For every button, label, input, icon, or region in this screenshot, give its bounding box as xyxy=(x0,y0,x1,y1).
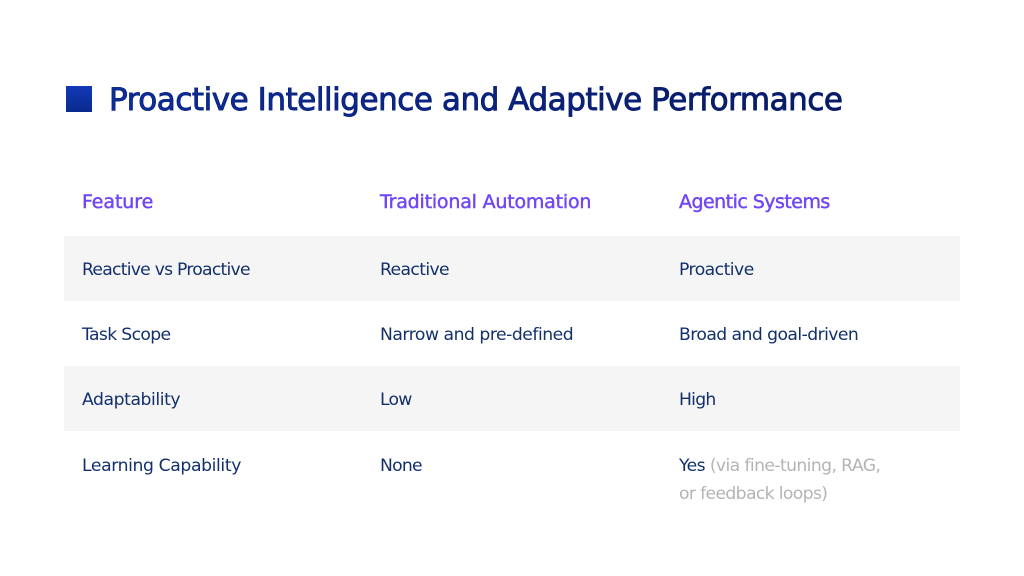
column heading: Agentic Systems: Agentic Systems xyxy=(679,191,830,213)
row background: Reactive vs Proactive xyxy=(64,236,960,301)
cell: Low: Low xyxy=(380,390,412,410)
column heading: Feature: Feature xyxy=(82,191,153,213)
cell: Learning Capability: Learning Capability xyxy=(82,456,241,476)
cell: Yes with details: Yes (via fine-tuning, RAG, xyxy=(679,456,880,476)
cell: Yes with details: or feedback loops) xyxy=(679,484,827,504)
cell: Task Scope: Task Scope xyxy=(82,325,170,345)
cell: Reactive: Reactive xyxy=(380,260,449,280)
cell: High: High xyxy=(679,390,716,410)
cell: Broad and goal-driven: Broad and goal-driven xyxy=(679,325,858,345)
cell: Proactive: Proactive xyxy=(679,260,754,280)
cell: None: None xyxy=(380,456,422,476)
cell: Adaptability: Adaptability xyxy=(82,390,180,410)
row background: Adaptability xyxy=(64,366,960,431)
cell: Narrow and pre-defined: Narrow and pre-defined xyxy=(380,325,573,345)
cell: Reactive vs Proactive: Reactive vs Proactive xyxy=(82,260,250,280)
column heading: Traditional Automation: Traditional Automation xyxy=(380,191,591,213)
icon: title square xyxy=(66,86,92,112)
title: Proactive Intelligence and Adaptive Performance xyxy=(109,82,843,118)
cell: Yes with details xyxy=(679,456,880,504)
